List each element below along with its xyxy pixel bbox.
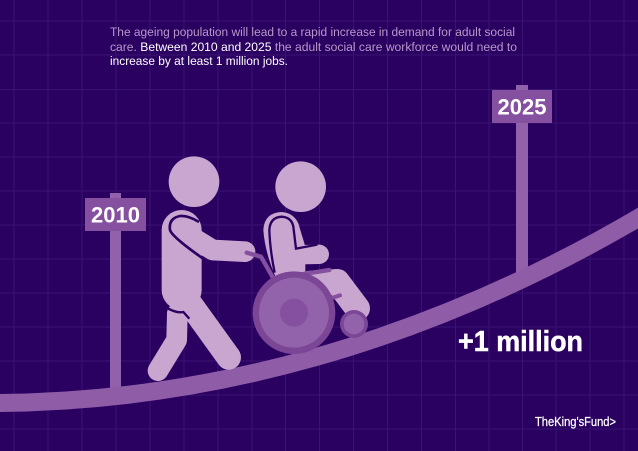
intro text: The ageing population will lead to a rapid increase in demand for adult social	[110, 25, 515, 39]
post: 2010: 2010	[91, 202, 140, 228]
post: 2025: 2025	[498, 94, 546, 120]
rising curve	[0, 214, 638, 403]
headline: +1 million: +1 million	[458, 326, 583, 358]
intro text: increase by at least 1 million jobs.	[110, 54, 288, 68]
intro text: care. Between 2010 and 2025 the adult social care workforce would need to	[110, 40, 517, 54]
figures	[158, 156, 368, 371]
intro text	[110, 25, 517, 68]
logo: The King's Fund: TheKing'sFund>	[535, 414, 616, 429]
post: 2025	[492, 85, 552, 277]
icon: person pushing	[158, 156, 245, 371]
icon: person in wheelchair	[247, 161, 368, 354]
post: 2010	[85, 193, 146, 393]
